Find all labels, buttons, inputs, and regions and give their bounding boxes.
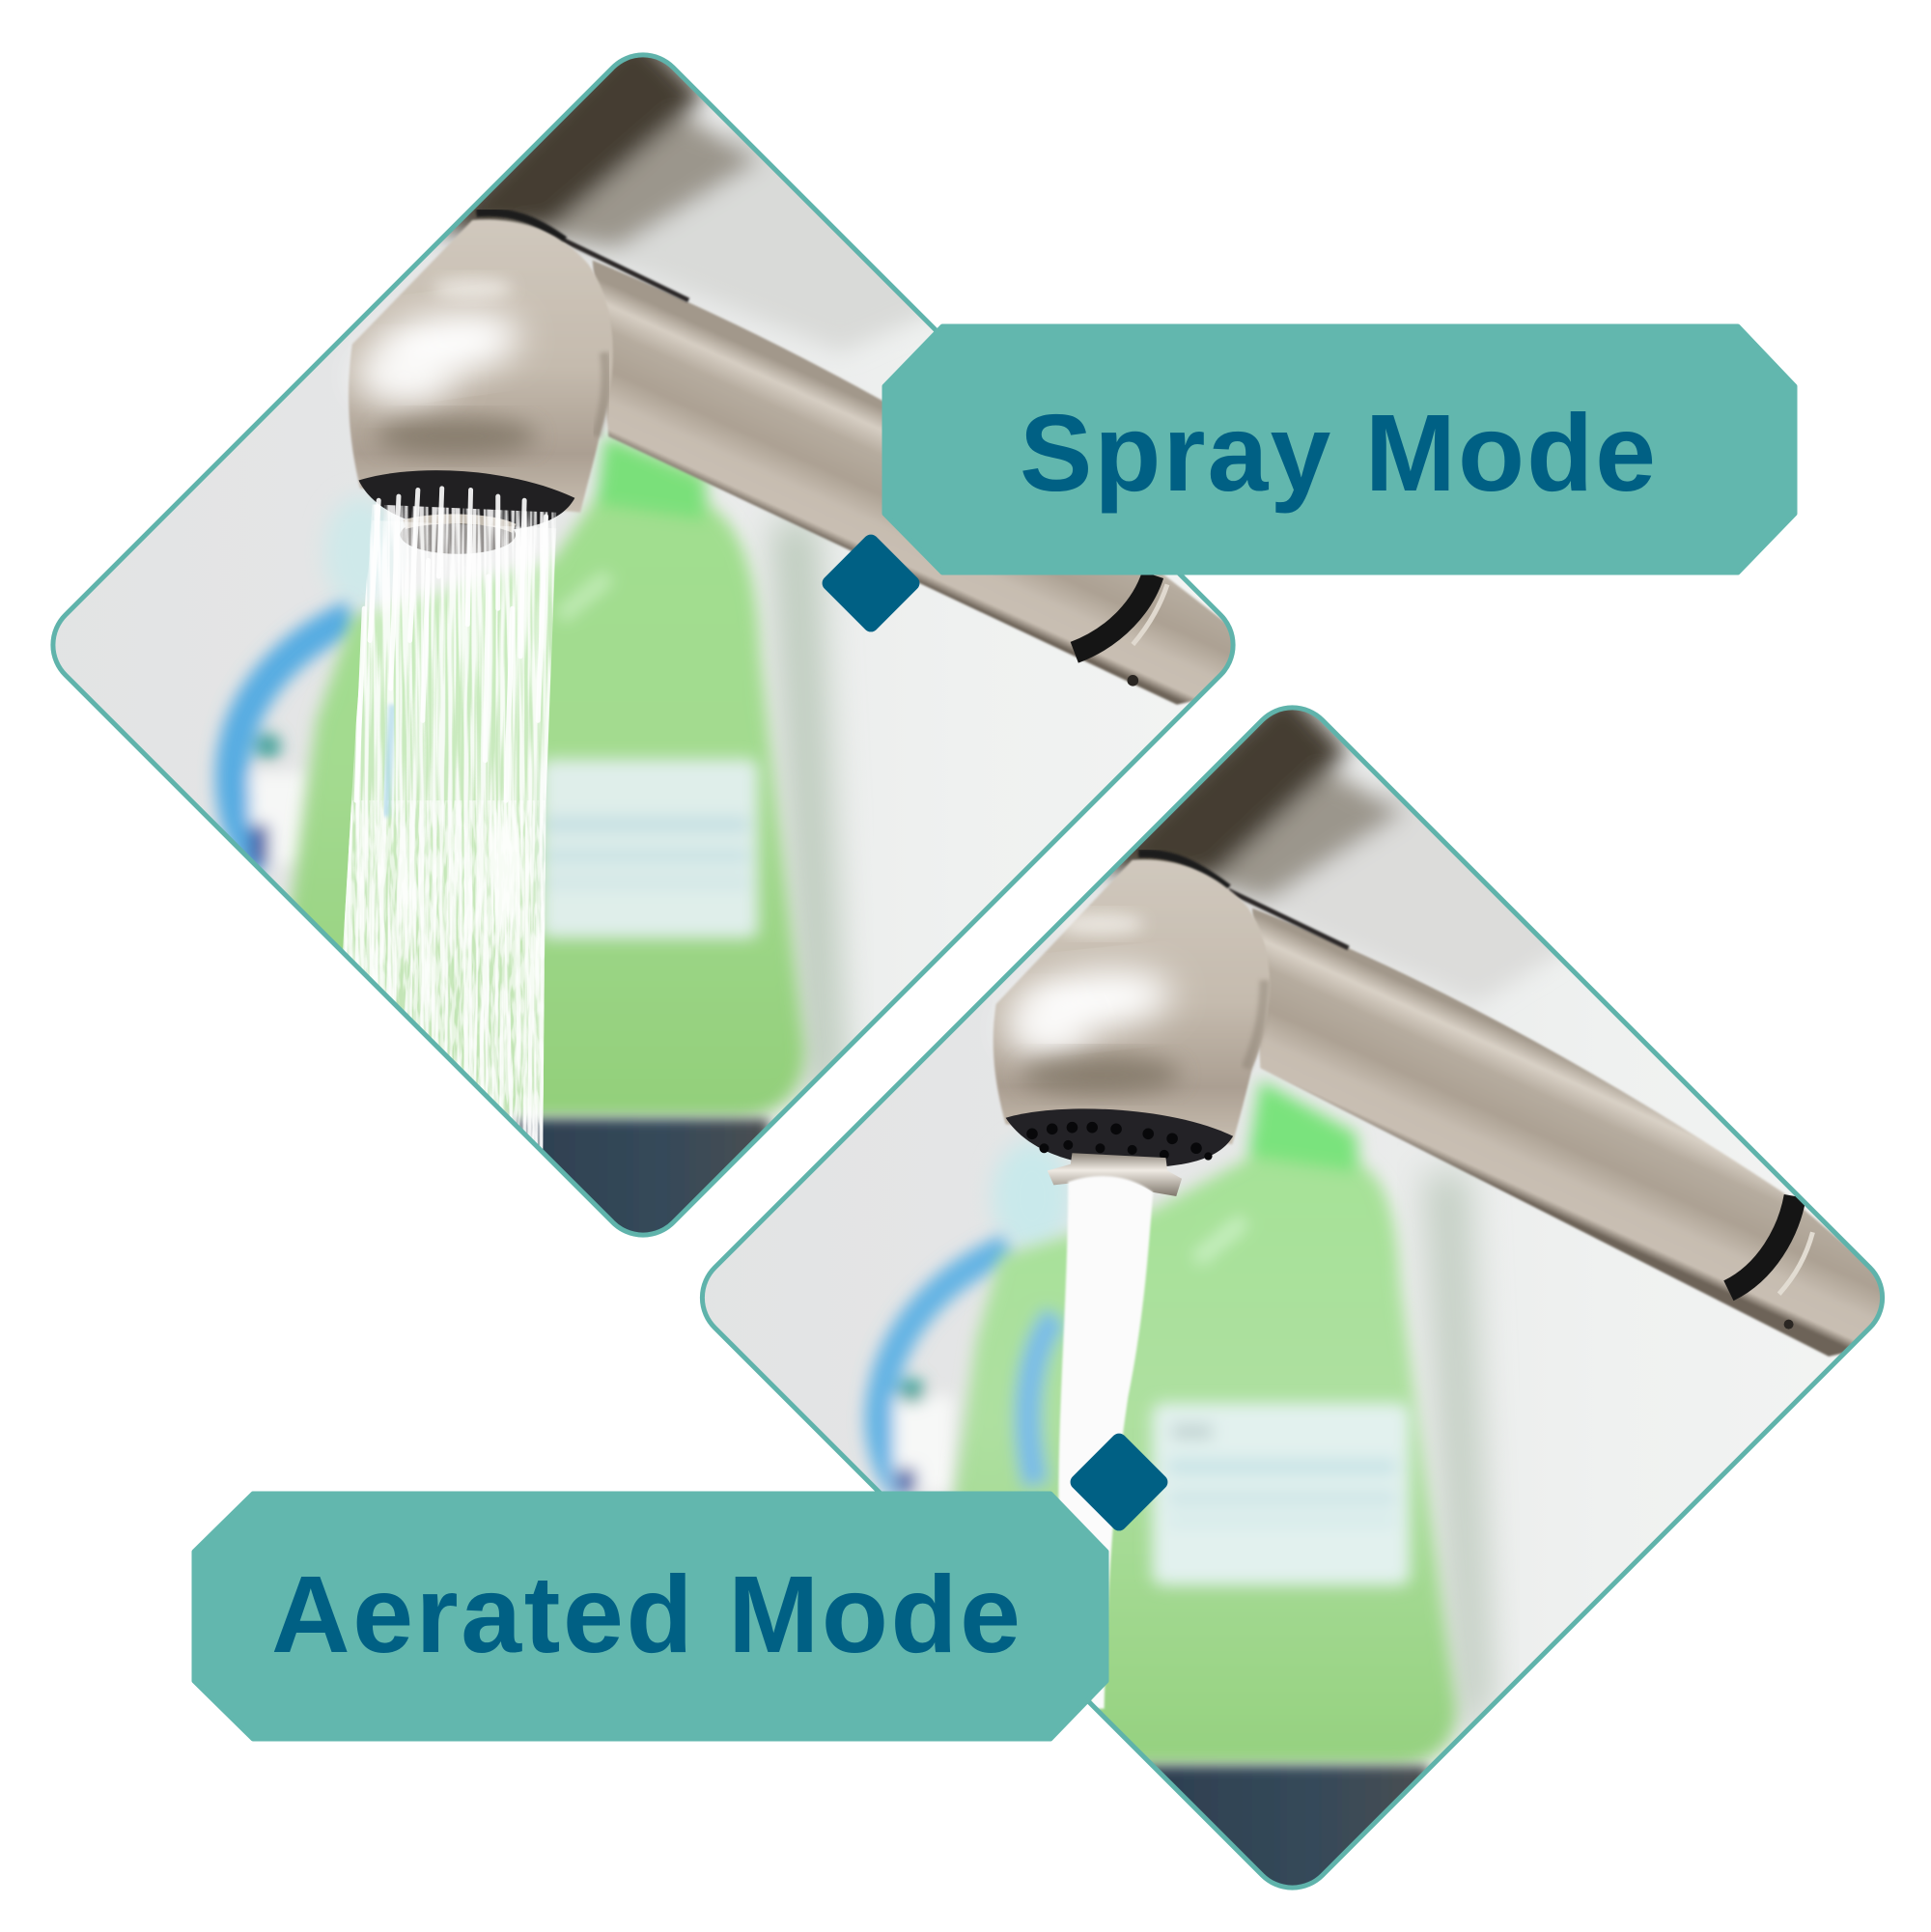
photo background <box>56 87 1218 1126</box>
label: spray mode <box>884 326 1795 573</box>
faucet head <box>349 219 613 513</box>
photo: faucet in aerated mode <box>705 710 1881 1886</box>
dark counter base <box>508 1110 774 1233</box>
heading: aerated mode: Aerated Mode <box>271 1554 1021 1675</box>
black ring <box>1075 574 1153 653</box>
panel: spray mode photo <box>50 52 1236 1238</box>
aerator <box>401 516 516 554</box>
out of focus bottle shadow <box>772 520 845 1113</box>
label: aerated mode <box>194 1494 1106 1739</box>
diamond outline: aerated <box>685 690 1900 1905</box>
marker diamond: aerated <box>1067 1430 1171 1534</box>
spray head black rim <box>358 470 574 531</box>
panel: aerated mode photo <box>699 705 1885 1890</box>
dark counter base <box>1140 1766 1428 1926</box>
aerated water stream <box>1058 1176 1153 1709</box>
out of focus teal glow <box>993 1140 1072 1252</box>
perforated black rim <box>1006 1108 1233 1167</box>
out of focus green bottle <box>289 436 804 1117</box>
counter underside shadow <box>436 57 923 351</box>
out of focus teal glow <box>324 496 396 608</box>
out of focus green bottle <box>952 1080 1456 1765</box>
out of focus blue logo <box>232 616 352 869</box>
aerator collar <box>1048 1153 1182 1196</box>
spray water <box>340 489 560 1153</box>
bottle label <box>1152 1403 1410 1585</box>
photo background <box>705 713 1838 1769</box>
counter underside shadow <box>1101 710 1556 1002</box>
faucet head <box>993 859 1270 1144</box>
out of focus blue logo <box>880 1248 1008 1493</box>
photo: faucet in spray mode <box>56 57 1231 1233</box>
spout tube <box>476 212 1249 705</box>
out of focus bottle shadow <box>1424 1172 1493 1749</box>
marker diamond: spray <box>819 531 923 635</box>
heading: spray mode: Spray Mode <box>1020 392 1656 514</box>
black ring <box>1728 1196 1795 1291</box>
diamond outline: spray <box>36 38 1250 1252</box>
spout tube <box>1138 854 1901 1357</box>
bottle label <box>541 759 758 938</box>
